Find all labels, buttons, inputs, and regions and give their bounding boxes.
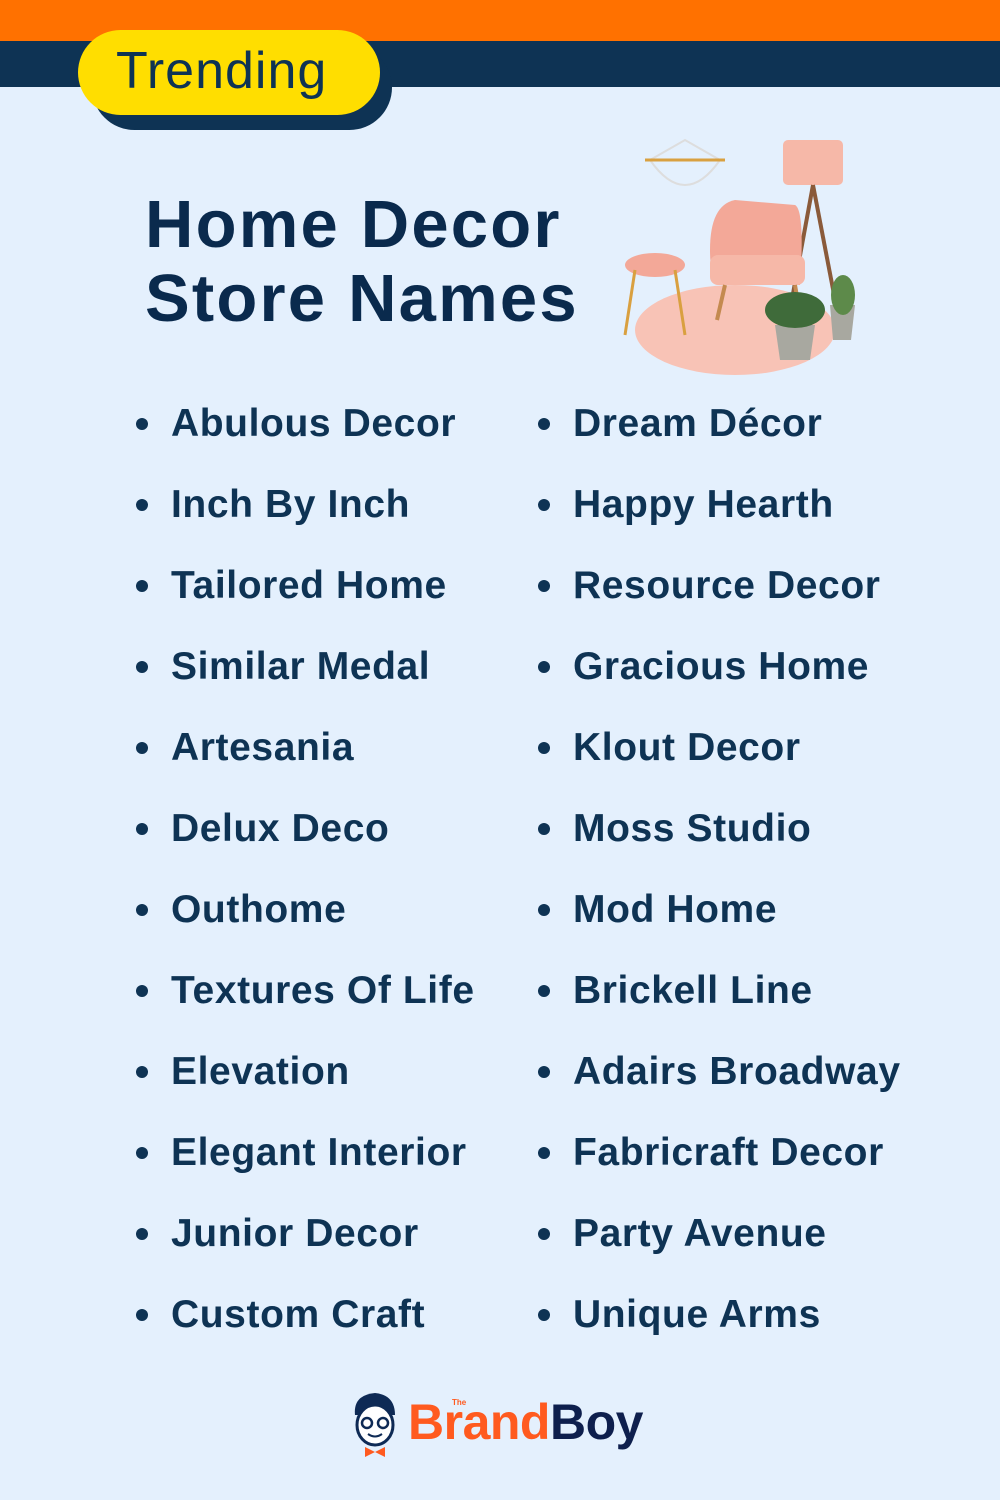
item: Elegant Interior xyxy=(171,1131,467,1174)
item: Custom Craft xyxy=(171,1293,425,1336)
item: Happy Hearth xyxy=(573,483,834,526)
list: right column xyxy=(354,402,901,1446)
item: Similar Medal xyxy=(171,645,430,688)
item: Brickell Line xyxy=(573,969,813,1012)
item: Inch By Inch xyxy=(171,483,410,526)
title: Store Names xyxy=(145,261,579,336)
item: Adairs Broadway xyxy=(573,1050,901,1093)
item: Unique Arms xyxy=(573,1293,821,1336)
navy band xyxy=(0,41,1000,87)
item: Dream Décor xyxy=(573,402,822,445)
item: Abulous Decor xyxy=(171,402,456,445)
item: Moss Studio xyxy=(573,807,811,850)
logo: The BrandBoy: BrandBoy xyxy=(408,1394,643,1450)
illustration: furniture xyxy=(624,139,855,375)
list: left column xyxy=(136,402,475,1446)
item: Party Avenue xyxy=(573,1212,827,1255)
icon: boy face xyxy=(354,1393,395,1457)
title xyxy=(145,187,579,336)
item: Elevation xyxy=(171,1050,350,1093)
top orange band xyxy=(0,0,1000,41)
item: Junior Decor xyxy=(171,1212,419,1255)
title: Home Decor xyxy=(145,187,562,262)
item: Outhome xyxy=(171,888,346,931)
item: Delux Deco xyxy=(171,807,389,850)
item: Tailored Home xyxy=(171,564,447,607)
item: Artesania xyxy=(171,726,354,769)
item: Klout Decor xyxy=(573,726,801,769)
item: Fabricraft Decor xyxy=(573,1131,884,1174)
item: Mod Home xyxy=(573,888,777,931)
item: Textures Of Life xyxy=(171,969,475,1012)
item: Gracious Home xyxy=(573,645,869,688)
item: Resource Decor xyxy=(573,564,881,607)
badge: trending xyxy=(78,30,392,130)
logo: The BrandBoy: The xyxy=(452,1398,466,1407)
badge: trending: Trending xyxy=(116,42,327,100)
